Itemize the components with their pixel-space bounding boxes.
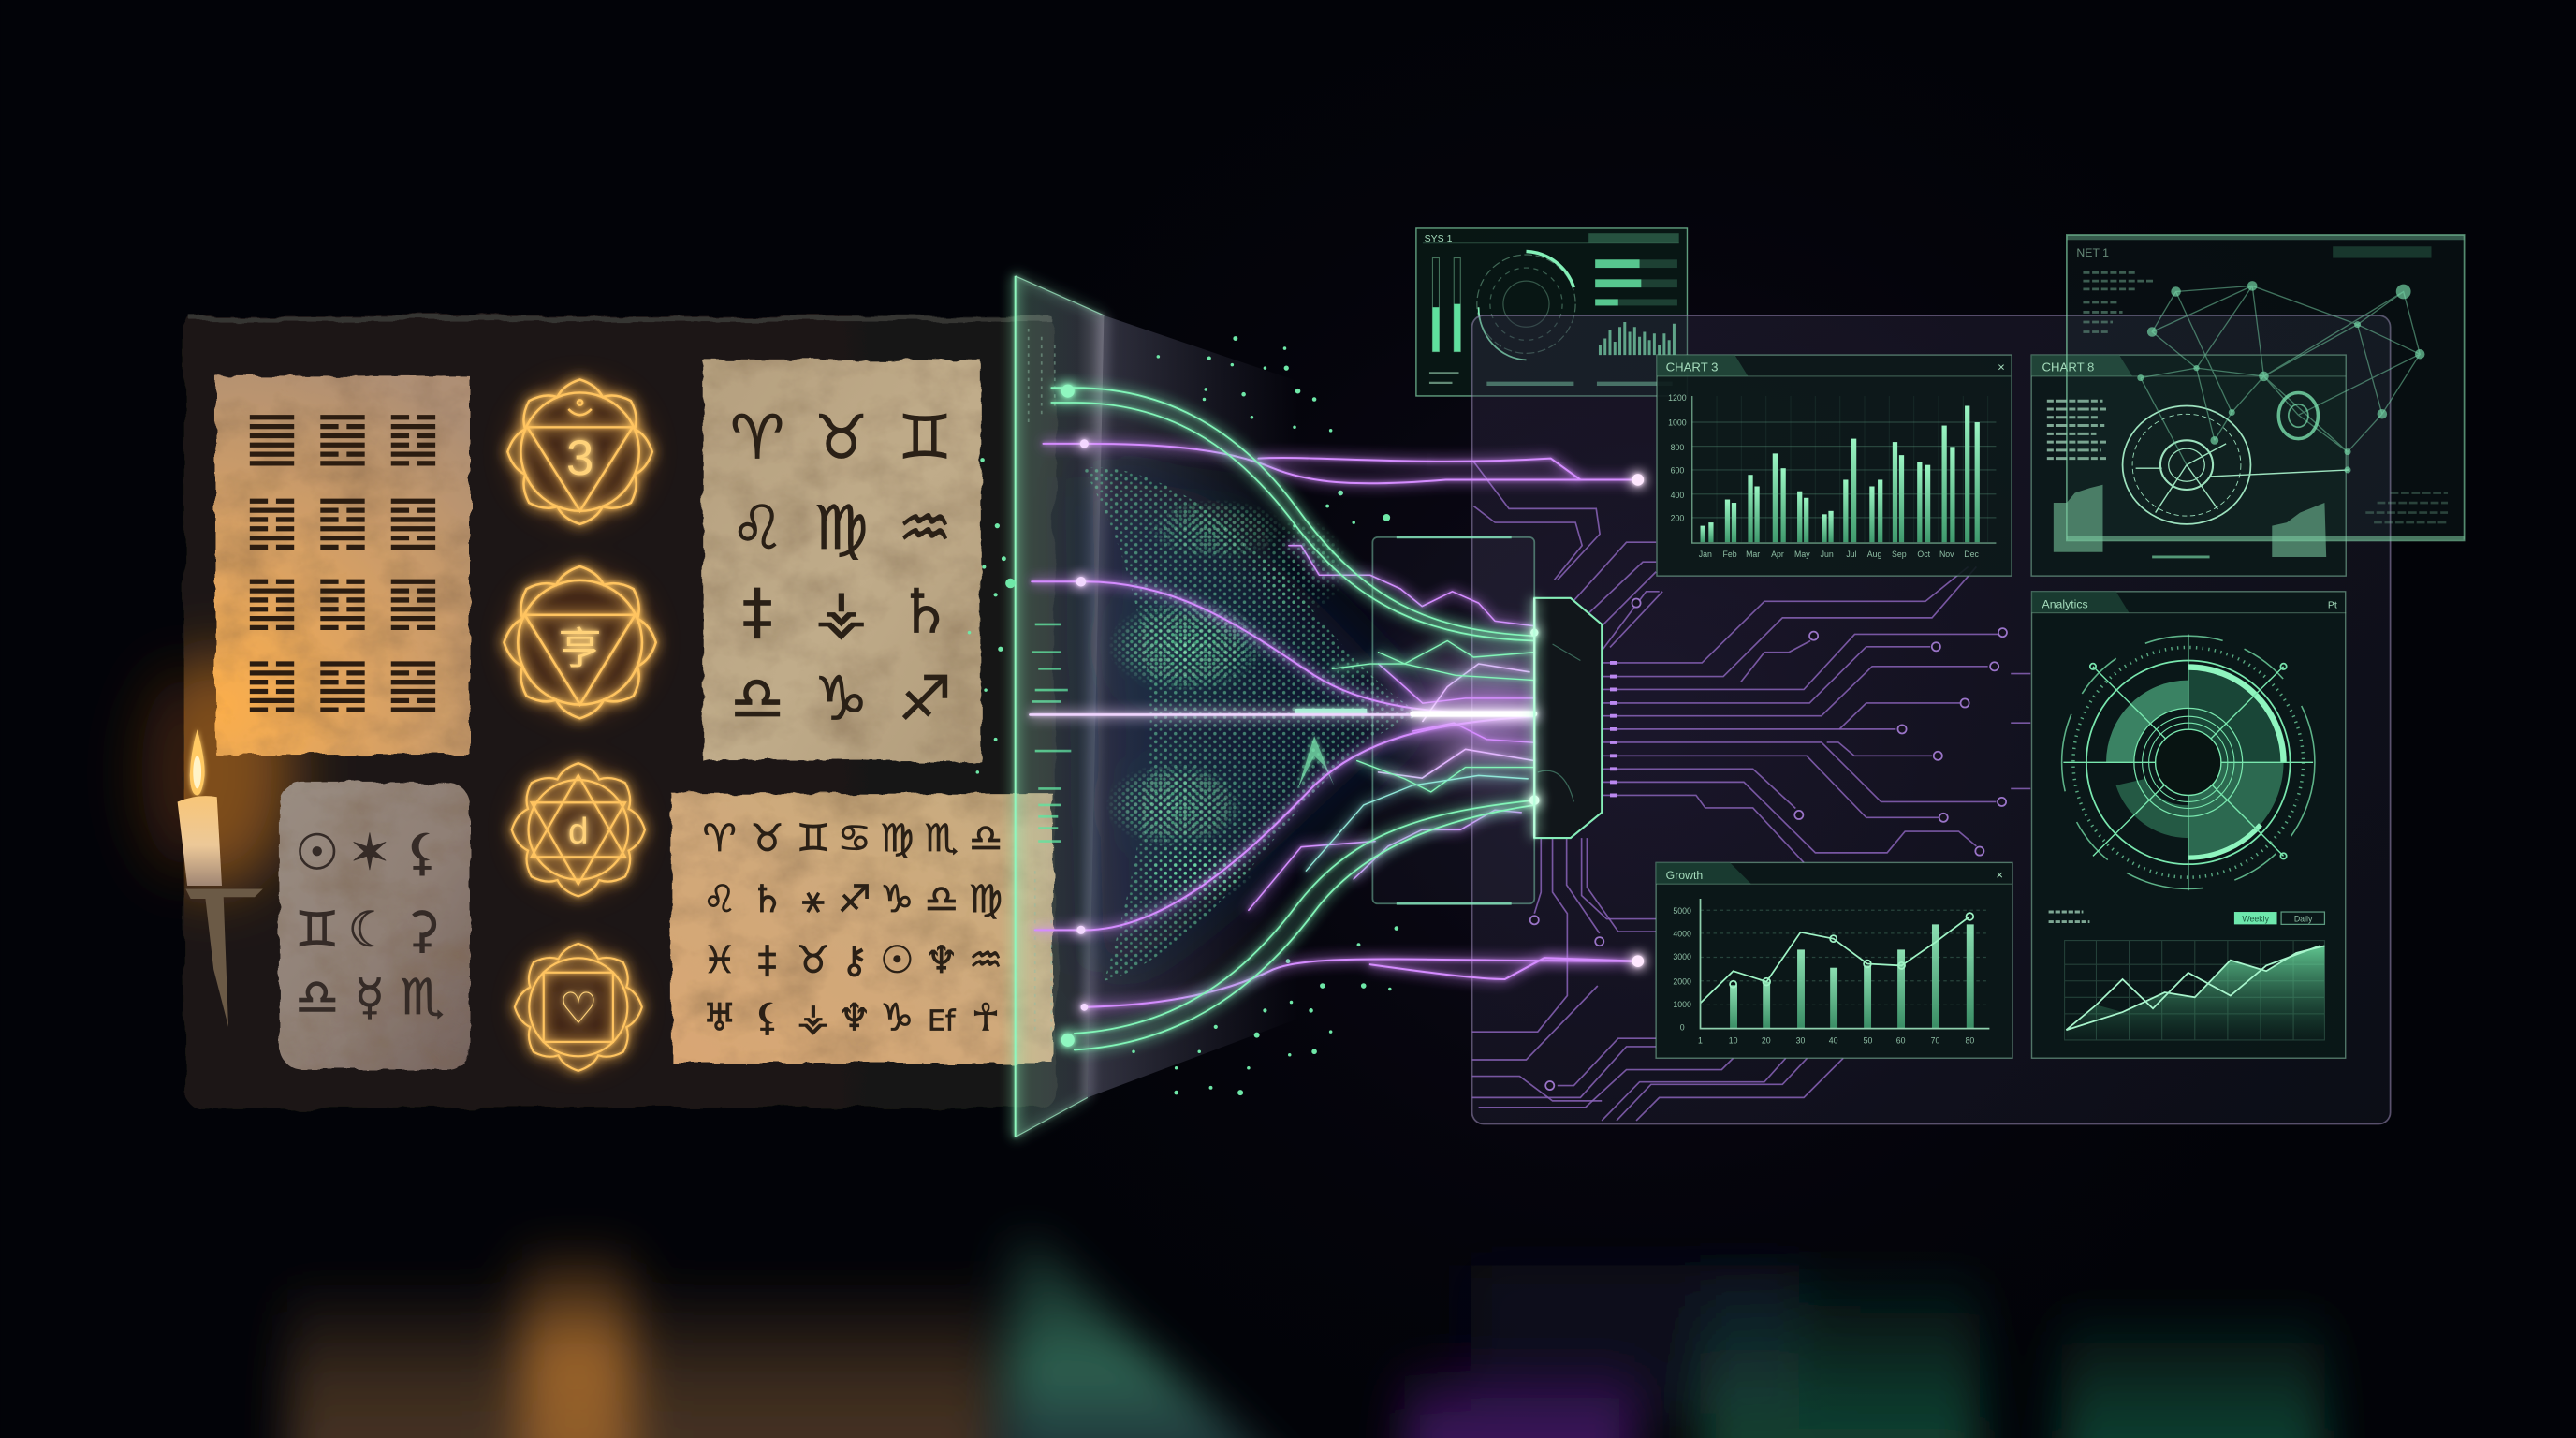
axis labels: 5000 [1673, 906, 1691, 916]
symbol rows: ♊︎ [797, 816, 830, 860]
reflection: warm parchment glow [287, 1232, 994, 1438]
symbol rows: ⚸ [754, 995, 781, 1039]
panel header [1656, 862, 2012, 884]
axis labels: 2000 [1673, 976, 1691, 986]
radar header: Pt [2328, 599, 2337, 610]
axis labels: 200 [1671, 513, 1684, 522]
prism: glass pane [1016, 276, 1104, 1137]
zodiac symbols: ♄ [898, 578, 952, 648]
symbol rows: ♆ [838, 995, 871, 1039]
panel: radar and trend [2032, 592, 2346, 1058]
zodiac symbols: ♐︎ [898, 665, 952, 735]
axis labels: Apr [1771, 550, 1784, 559]
stream nodes [1061, 385, 1644, 1047]
axis labels [1673, 906, 1974, 1045]
panel: I Ching parchment [215, 376, 470, 755]
prism: readouts [1029, 329, 1071, 1035]
chakra: om [507, 379, 652, 524]
axis labels: Mar [1746, 550, 1760, 559]
axis labels: 600 [1671, 465, 1684, 475]
chakra halos [505, 379, 655, 1070]
zodiac symbols: ♑︎ [814, 665, 869, 735]
symbol rows: ♓︎ [703, 938, 737, 982]
trend controls [2049, 912, 2324, 924]
stone slab [184, 315, 1055, 1108]
chakra: om: 3 [566, 431, 593, 486]
carved symbols: ♊︎ [295, 902, 339, 959]
symbol rows: ♑︎ [880, 877, 914, 921]
axis labels: 10 [1729, 1035, 1738, 1045]
prism [1016, 276, 1298, 1137]
dial header: CHART 8 [2042, 360, 2094, 374]
zodiac symbols: ♌︎ [730, 493, 784, 564]
axis labels: 1200 [1668, 393, 1687, 403]
status bars [1486, 383, 1673, 385]
candle [178, 729, 263, 1027]
carved symbols: ☿ [355, 969, 385, 1026]
ghost frame [1372, 537, 1534, 903]
dial header [2031, 355, 2346, 376]
zodiac symbols: ♎︎ [730, 665, 784, 735]
circuit traces [1472, 462, 2030, 1121]
carved symbols: ⚳ [404, 902, 440, 959]
floating network panel [2067, 235, 2465, 540]
zodiac symbols: ⚶ [815, 578, 867, 648]
panel: zodiac parchment [703, 360, 981, 761]
trend line [1701, 913, 1973, 1003]
text lines [2047, 401, 2106, 459]
header [1423, 242, 1679, 244]
panel: carved stone tablet [279, 782, 470, 1070]
symbol rows: ☉ [880, 938, 914, 982]
dashed grid [1701, 910, 1988, 1005]
progress bars [1595, 259, 1677, 305]
axis labels: 4000 [1673, 929, 1691, 938]
axis labels: 60 [1896, 1035, 1906, 1045]
chart panel: bars with line [1656, 862, 2012, 1058]
candle light on slab [135, 654, 292, 890]
carved symbols: ✶ [349, 824, 390, 881]
technical dial [2123, 405, 2349, 524]
symbol rows: ♆ [925, 938, 959, 982]
carved symbols: ♎︎ [295, 969, 339, 1026]
green streams [1051, 388, 1534, 1049]
axis labels: Jun [1821, 550, 1834, 559]
chip bright edge [1533, 598, 1535, 838]
carved symbols: ⚸ [404, 824, 440, 881]
hexagram grid [250, 418, 435, 710]
chakra: throat [505, 566, 656, 718]
purple streams [1032, 444, 1636, 1007]
trend controls: Daily [2294, 915, 2313, 924]
axis labels: Feb [1723, 550, 1737, 559]
symbol rows: ♌︎ [703, 877, 737, 921]
trend controls: Weekly [2242, 915, 2270, 924]
axis labels: Dec [1964, 550, 1980, 559]
data streams [1030, 388, 1636, 1049]
mini bar chart [1600, 322, 1674, 355]
axis labels: Jul [1846, 550, 1857, 559]
chart panel: dial report [2031, 355, 2349, 576]
radar header: Analytics [2042, 597, 2088, 610]
zodiac symbols: ♈︎ [730, 404, 784, 474]
reflection: prism streak [1003, 1232, 1290, 1438]
axis labels: 70 [1931, 1035, 1939, 1045]
axis labels: Jan [1699, 550, 1712, 559]
faint side notes [2365, 493, 2448, 522]
central processor chip [1534, 598, 1602, 838]
candle body [178, 796, 222, 886]
radar hub [2156, 729, 2221, 795]
bars [1730, 924, 1974, 1029]
symbol rows: ♍︎ [969, 877, 1003, 921]
chakra: heart star [512, 763, 645, 896]
network graph [2141, 286, 2420, 470]
chakra: heart star: d [568, 812, 589, 852]
network header: NET 1 [2076, 246, 2109, 259]
symbol rows: ♐︎ [838, 877, 871, 921]
carved symbols [295, 824, 445, 1026]
zodiac symbols [730, 404, 952, 735]
axis labels: 1 [1698, 1035, 1703, 1045]
small target ring [2278, 392, 2318, 439]
axis labels: 1000 [1668, 418, 1687, 428]
particle cloud [1083, 467, 1423, 981]
zodiac symbols: ♒︎ [898, 493, 952, 564]
symbol rows [703, 816, 1003, 1039]
stream bloom [1412, 666, 1560, 764]
symbol rows: ♎︎ [969, 816, 1003, 860]
radar header [2032, 592, 2346, 613]
reflection: violet and green panels [1405, 1257, 2324, 1438]
axis labels: Oct [1917, 550, 1931, 559]
carved symbols: ☾ [347, 902, 392, 959]
cloud: dense clusters [1105, 500, 1347, 903]
symbol rows: ♎︎ [925, 877, 959, 921]
symbol rows: ⚷ [841, 938, 868, 982]
symbol rows: ⚹ [802, 877, 825, 921]
ring gauge [1477, 252, 1575, 360]
axis labels: Sep [1892, 550, 1907, 559]
symbol rows: ♅ [703, 995, 737, 1039]
chart grid [1692, 422, 1996, 518]
candle holder [185, 888, 263, 1027]
symbol rows: ♑︎ [880, 995, 914, 1039]
axis labels: 800 [1671, 443, 1684, 452]
chart bars [1701, 405, 1980, 542]
axis labels: May [1794, 550, 1810, 559]
symbol rows: ♉︎ [751, 816, 784, 860]
carved symbols: ☉ [295, 824, 339, 881]
axis labels: 50 [1864, 1035, 1873, 1045]
radar gauge [2062, 634, 2315, 890]
prism: back fade [1088, 315, 1298, 1097]
panel: symbol chart parchment [672, 794, 1053, 1064]
axis labels: 40 [1829, 1035, 1838, 1045]
chart header [1657, 355, 2011, 376]
symbol rows: ♏︎ [925, 816, 959, 860]
candle glow outside slab [141, 670, 227, 874]
symbol rows: ⚶ [798, 995, 829, 1039]
axis labels: 30 [1796, 1035, 1806, 1045]
symbol rows: ♍︎ [880, 816, 914, 860]
symbol rows: ♒︎ [969, 938, 1003, 982]
symbol rows: ♈︎ [703, 816, 737, 860]
main glass panel [1472, 315, 2391, 1123]
small dashboard panel: SYS 1 [1425, 233, 1453, 244]
floor reflection [287, 1232, 2324, 1438]
chart panel: monthly bars [1657, 355, 2012, 576]
cloud: bright shard [1298, 736, 1334, 788]
zodiac symbols: ♉︎ [814, 404, 869, 474]
carved symbols: ♏︎ [400, 969, 445, 1026]
network nodes [2137, 281, 2424, 473]
axis labels: Nov [1939, 550, 1954, 559]
prism: bright edges [1016, 276, 1104, 1137]
chakra: throat: 亨 [559, 614, 602, 676]
axis labels: 1000 [1673, 1000, 1691, 1009]
chakra: root square [515, 944, 642, 1071]
symbol rows: Ef [928, 1005, 957, 1037]
chakra: root square: ♡ [559, 983, 598, 1034]
center beam [1030, 713, 1534, 715]
zodiac symbols: ♍︎ [814, 493, 869, 564]
axis labels: 20 [1762, 1035, 1771, 1045]
area trend chart [2065, 941, 2324, 1040]
cloud: dotted funnel [1083, 467, 1423, 981]
scattered particles [968, 336, 1398, 1095]
chip inner traces [1538, 644, 1580, 801]
symbol rows: ♋︎ [838, 816, 871, 860]
small dashboard panel [1416, 228, 1687, 396]
axis labels: Aug [1867, 550, 1881, 559]
panel header: Growth [1666, 869, 1703, 882]
chart header: CHART 3 [1666, 360, 1718, 374]
symbol rows: ‡ [758, 938, 777, 982]
chart header: × [1998, 360, 2005, 374]
zodiac symbols: ‡ [742, 578, 772, 648]
axis labels: 80 [1965, 1035, 1974, 1045]
small area blocks [2054, 485, 2102, 552]
vertical gauges [1432, 258, 1460, 352]
symbol rows: ☥ [972, 995, 1000, 1039]
chakra column [505, 379, 656, 1071]
zodiac symbols: ♊︎ [898, 404, 952, 474]
axis labels: 3000 [1673, 952, 1691, 961]
trace end nodes [1530, 599, 2007, 1090]
panel header: × [1996, 868, 2003, 882]
axis labels: 0 [1680, 1022, 1685, 1032]
axis labels: 400 [1671, 491, 1684, 500]
symbol rows: ♉︎ [797, 938, 830, 982]
axis labels [1668, 393, 1979, 559]
symbol rows: ♄ [751, 877, 784, 921]
cloud: soft glow [1092, 477, 1423, 979]
network header [2067, 238, 2465, 538]
candle flame [190, 729, 205, 795]
chip pin markers [1610, 663, 1617, 795]
